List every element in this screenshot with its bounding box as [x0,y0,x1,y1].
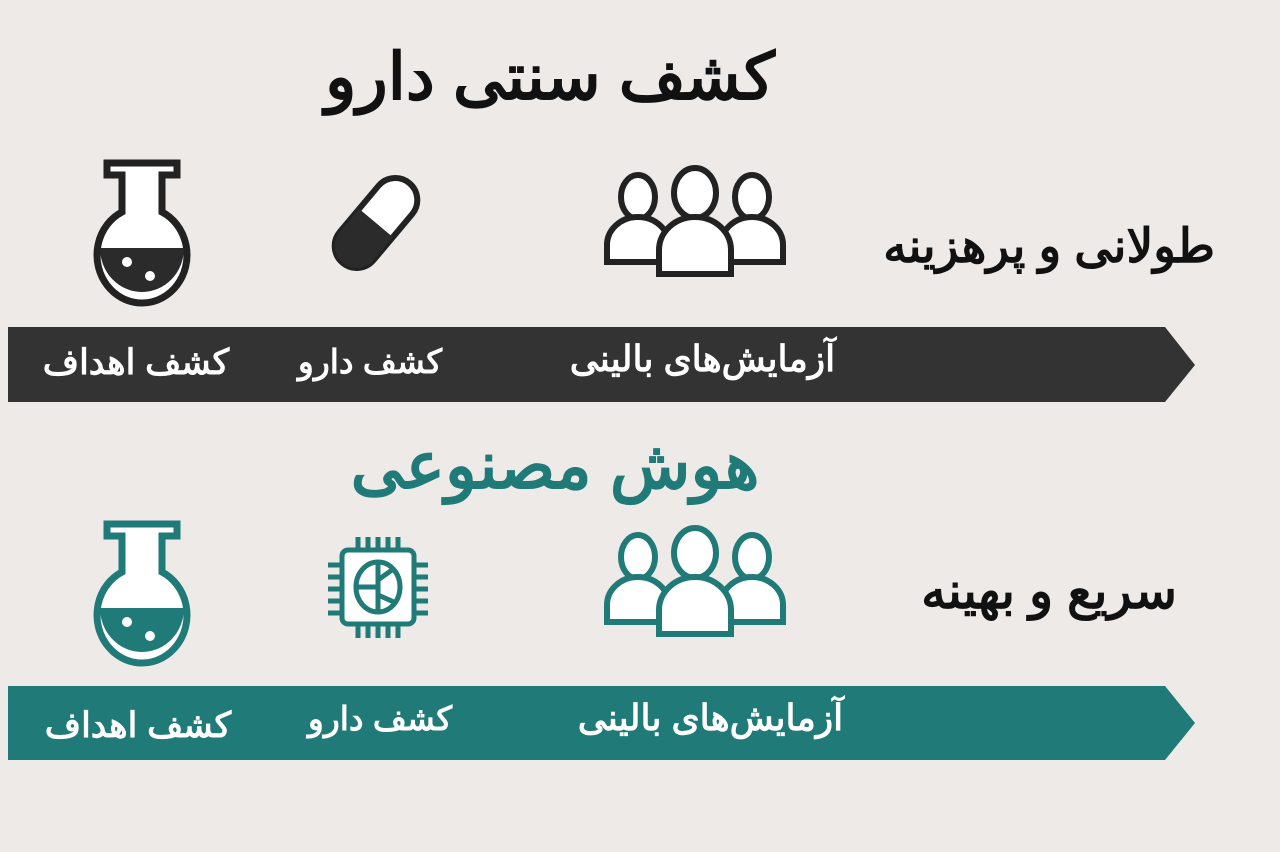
bar: traditional timeline [8,327,1195,402]
icon: pill [326,169,426,277]
icon: people teal [607,528,783,634]
icon: flask dark [97,163,187,303]
label: long and costly: طولانی و پرهزینه [883,219,1215,272]
label: target discovery AI: کشف اهداف [45,706,231,745]
label: fast and optimal: سریع و بهینه [921,563,1177,619]
title: AI: هوش مصنوعی [351,428,759,502]
bar2 labels [45,695,846,745]
icon: flask teal [97,524,187,663]
label: clinical trials: آزمایش‌های بالینی [570,338,835,379]
title: traditional: کشف سنتی دارو [325,40,775,113]
label: target discovery: کشف اهداف [43,343,229,382]
label: clinical trials AI: آزمایش‌های بالینی [578,697,843,738]
bar1 labels [43,336,838,382]
bar: AI timeline [8,686,1195,760]
label: drug discovery: کشف دارو [298,343,442,380]
icon: AI chip [328,537,428,638]
label: drug discovery AI: کشف دارو [308,700,452,737]
icon: people dark [607,168,783,274]
